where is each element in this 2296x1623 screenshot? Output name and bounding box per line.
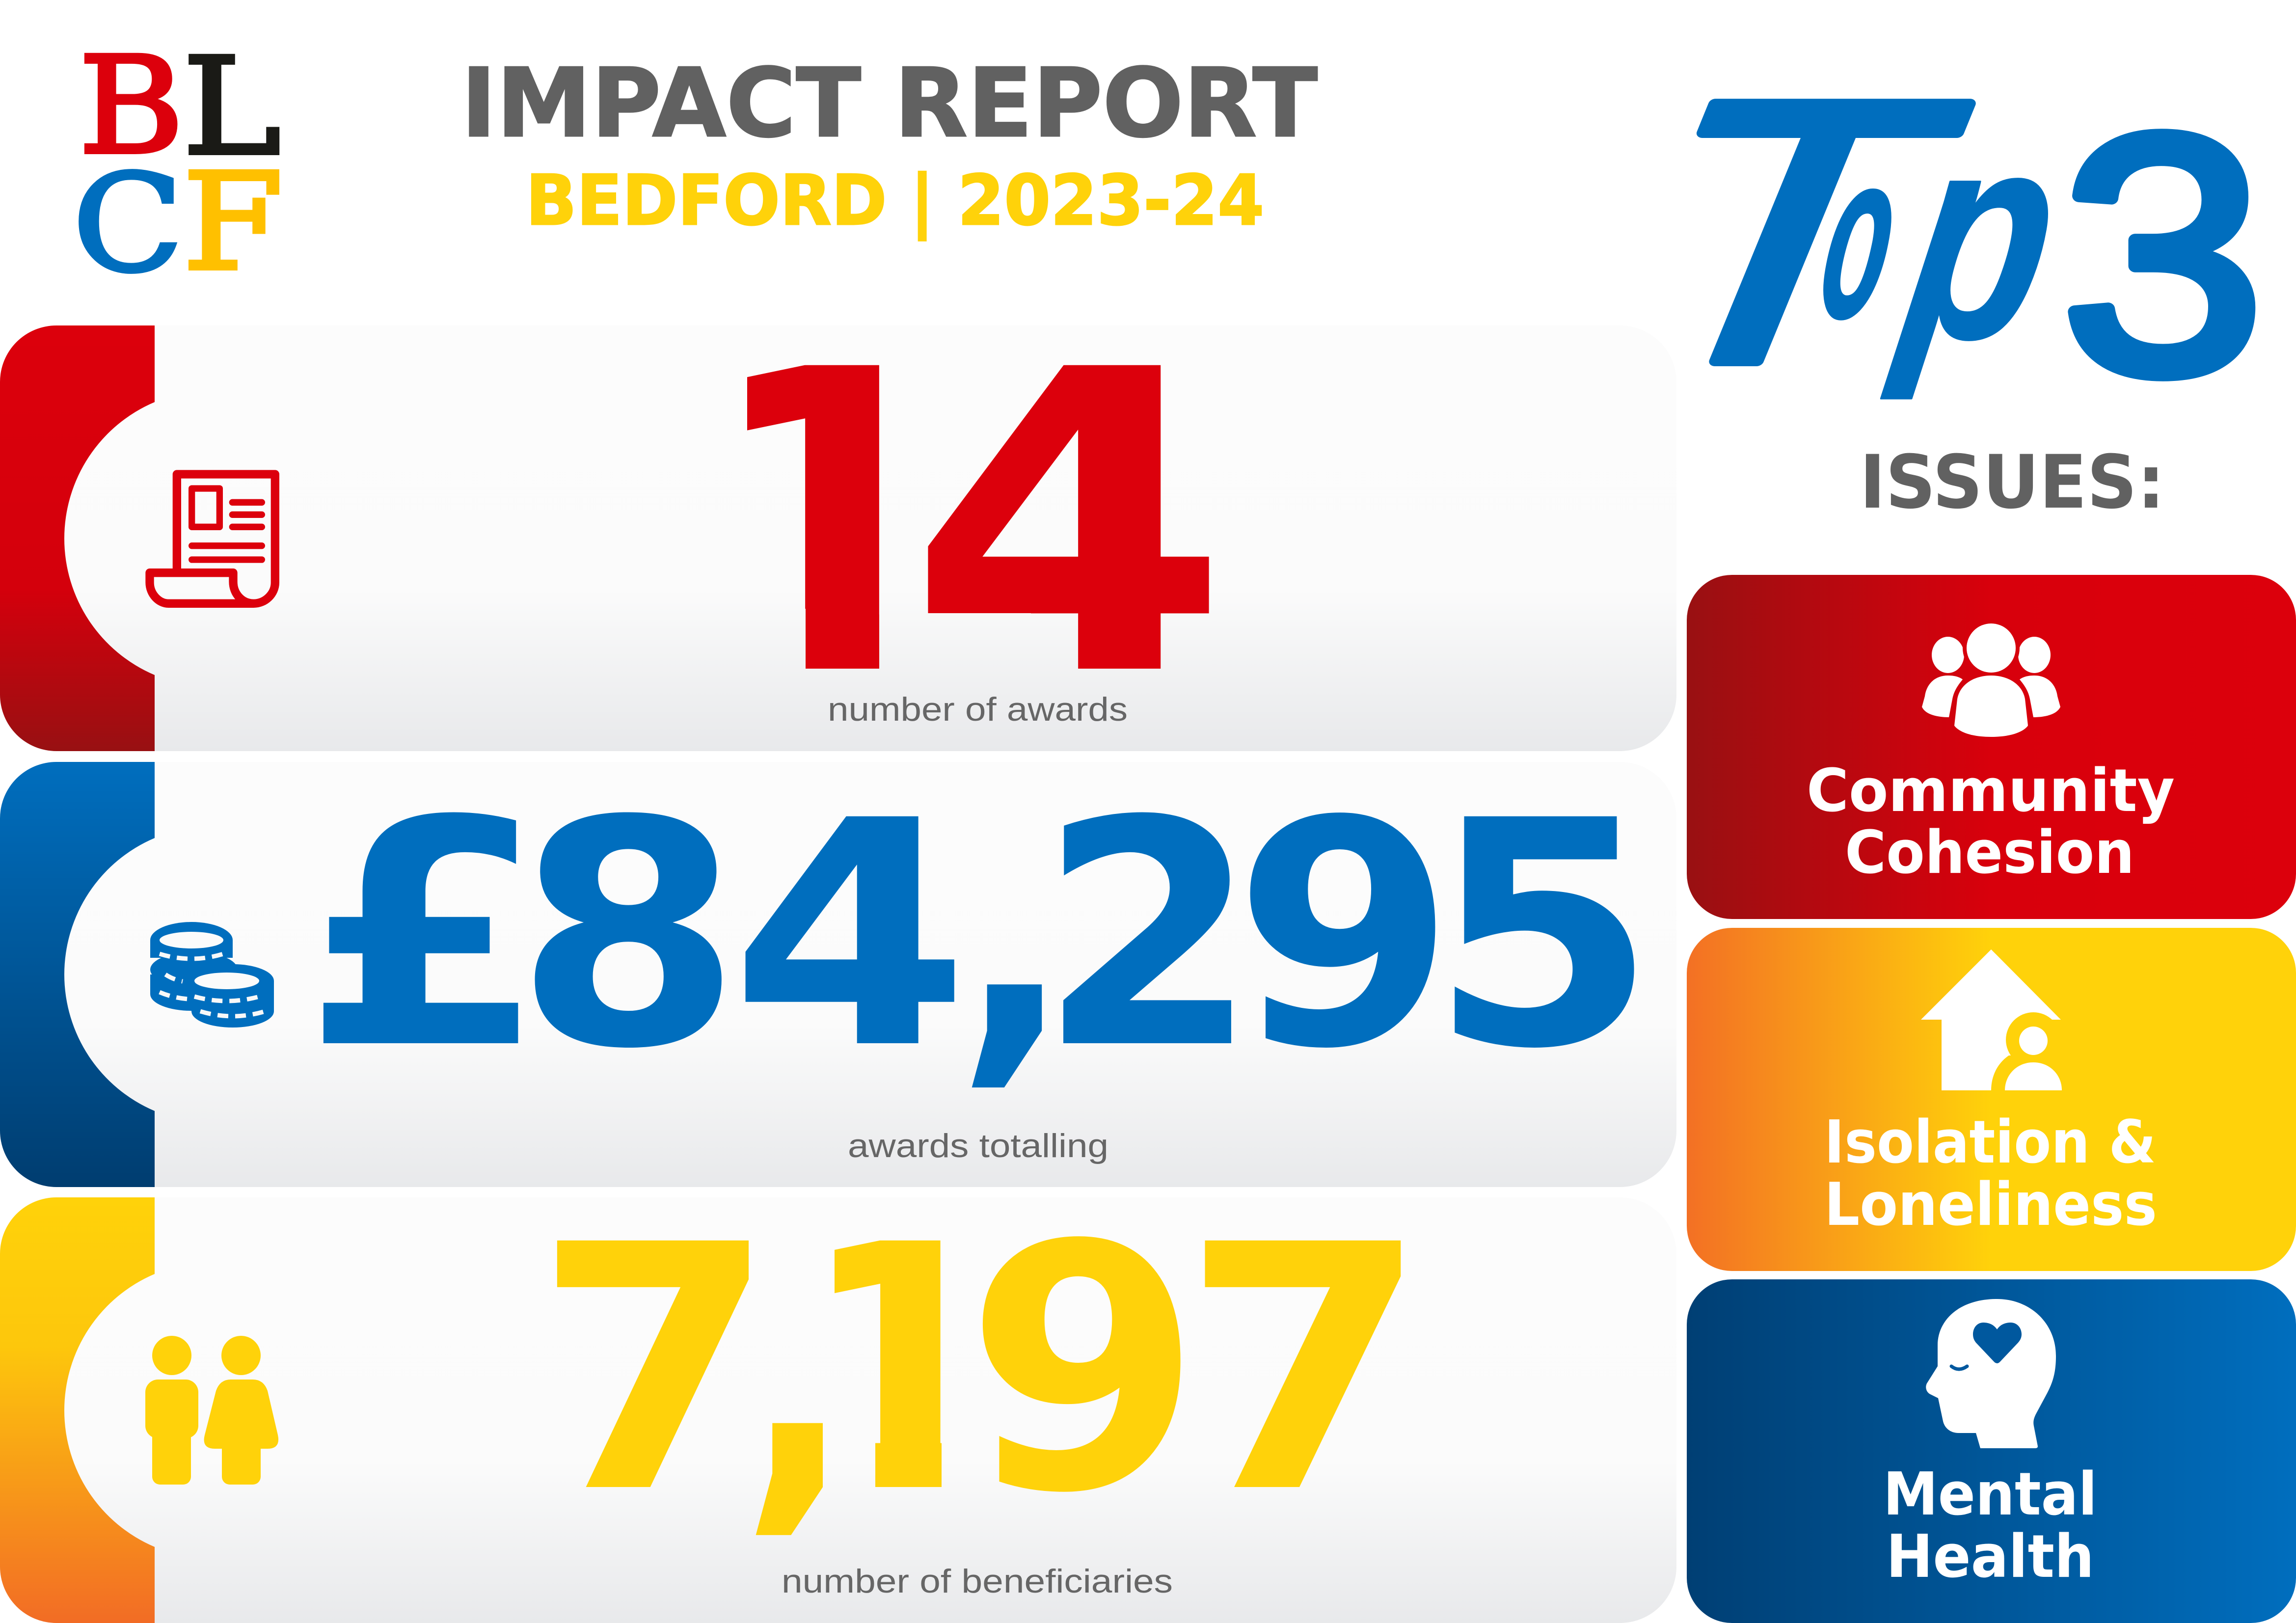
tile label: Isolation & bbox=[1824, 1109, 2156, 1177]
statistic: £84,295: 4 bbox=[730, 755, 970, 1117]
label: number of beneficiaries: number of beneficiaries bbox=[782, 1563, 1173, 1600]
heading: Top 3: p bbox=[1878, 71, 2081, 402]
logo: BLCF: B bbox=[79, 29, 184, 184]
statistic: £84,295: , bbox=[955, 755, 1074, 1117]
subtitle: BEDFORD | 2023-24 bbox=[526, 161, 1264, 241]
icon: head with heart bbox=[1926, 1299, 2056, 1448]
tile background bbox=[1687, 575, 2296, 919]
statistic: 7,197: 7 bbox=[1181, 1173, 1429, 1567]
tile background bbox=[1687, 928, 2296, 1271]
panel background bbox=[0, 762, 1676, 1187]
icon: person by house bbox=[1921, 949, 2067, 1092]
tile label: Mental bbox=[1883, 1461, 2097, 1529]
statistic: £84,295: 5 bbox=[1430, 755, 1657, 1117]
statistic: 7,197: 9 bbox=[965, 1173, 1202, 1567]
statistic: £84,295: 9 bbox=[1234, 755, 1456, 1117]
tile: Community Cohesion bbox=[1687, 575, 2296, 919]
statistic: 7,197: , bbox=[738, 1173, 866, 1567]
panel background bbox=[0, 1197, 1676, 1623]
tile label: Loneliness bbox=[1824, 1171, 2157, 1239]
red side band bbox=[0, 325, 155, 751]
heading: Top 3: 3 bbox=[2061, 65, 2265, 444]
panel: number of beneficiaries bbox=[0, 1173, 1676, 1623]
title: IMPACT REPORT bbox=[461, 48, 1318, 159]
tile: Isolation and Loneliness bbox=[1687, 928, 2296, 1271]
heading: Top 3: o bbox=[1806, 103, 1916, 367]
statistic: 14: 1 bbox=[687, 282, 977, 767]
icon: two people bbox=[145, 1336, 278, 1485]
tile background bbox=[1687, 1279, 2296, 1623]
logo: BLCF: L bbox=[183, 30, 281, 185]
blue side band bbox=[0, 762, 155, 1187]
logo: BLCF: F bbox=[183, 145, 283, 300]
statistic: 14: 4 bbox=[907, 282, 1230, 767]
icon: coins bbox=[150, 922, 274, 1028]
statistic: 7,197: 1 bbox=[784, 1173, 1020, 1567]
label: awards totalling: awards totalling bbox=[848, 1127, 1108, 1164]
heading: ISSUES: ISSUES: bbox=[1860, 440, 2165, 525]
yellow side band bbox=[0, 1197, 155, 1623]
panel background bbox=[0, 325, 1676, 751]
label: number of awards: number of awards bbox=[828, 691, 1128, 728]
statistic: £84,295: £ bbox=[302, 755, 547, 1117]
statistic: £84,295: 2 bbox=[1038, 755, 1259, 1117]
logo: BLCF: C bbox=[73, 147, 183, 302]
icon: group of people bbox=[1922, 623, 2060, 737]
logo: BLCF bbox=[73, 29, 283, 302]
statistic: £84,295: 8 bbox=[515, 755, 742, 1117]
tile: Mental Health bbox=[1687, 1279, 2296, 1623]
panel: number of awards bbox=[0, 325, 1676, 751]
tile label: Cohesion bbox=[1845, 819, 2134, 887]
icon: newspaper scroll bbox=[150, 474, 275, 603]
statistic: 7,197: 7 bbox=[534, 1173, 778, 1567]
tile label: Health bbox=[1886, 1523, 2094, 1591]
heading: Top 3 bbox=[1608, 24, 2265, 444]
panel: awards totalling bbox=[0, 755, 1676, 1187]
tile label: Community bbox=[1807, 757, 2175, 825]
heading: Top 3: T bbox=[1608, 24, 1984, 440]
